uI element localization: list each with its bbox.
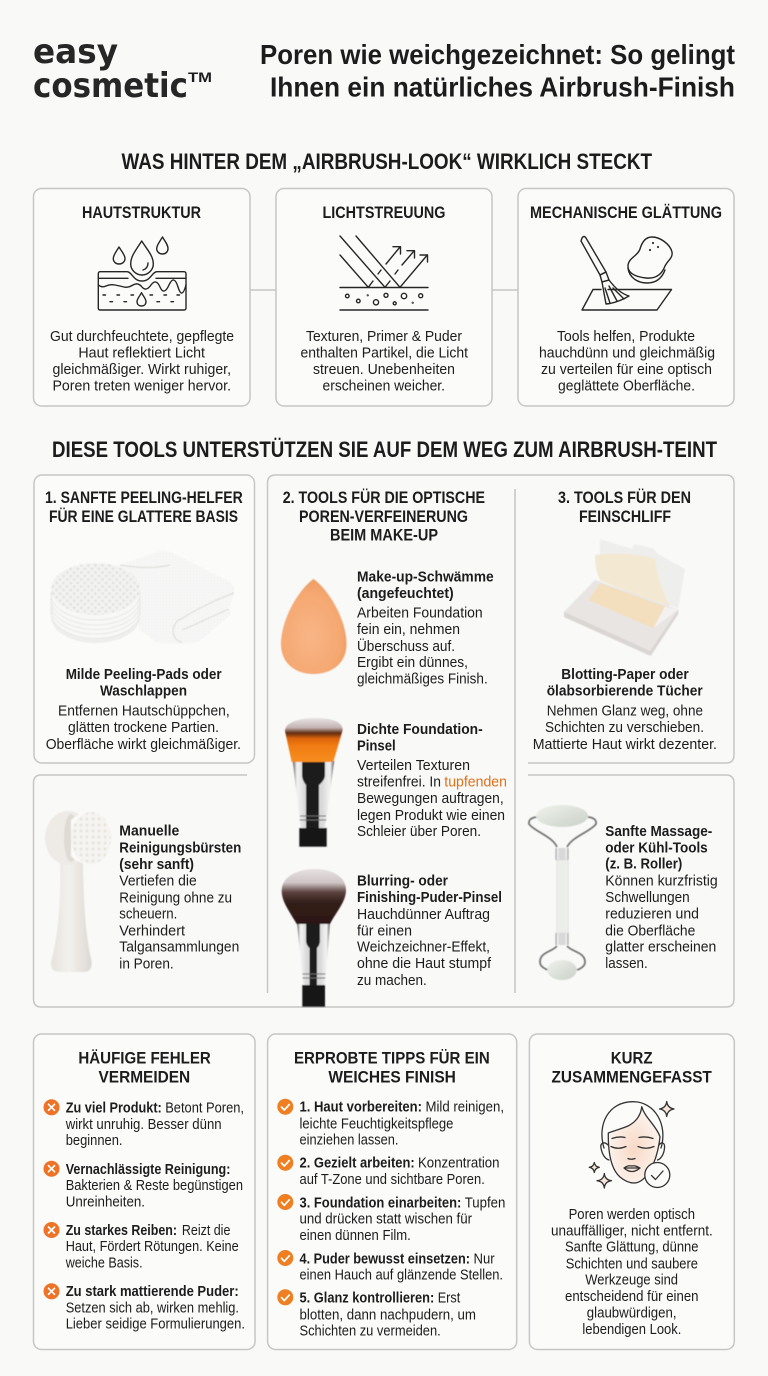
text: summary: Poren werden optisch xyxy=(569,1206,695,1223)
text: foundation brush xyxy=(357,721,507,840)
text: summary: Sanfte Glättung, dünne xyxy=(565,1239,698,1256)
icons: error markers xyxy=(44,1099,60,1299)
text: tips list: einen Hauch auf glänzende Stellen. xyxy=(300,1267,503,1284)
text: facial roller: oder Kühl-Tools xyxy=(605,839,708,856)
text: mistakes list: Zu viel Produkt: xyxy=(66,1099,162,1116)
icon: light scattering xyxy=(340,236,428,310)
text: blotting paper: Mattierte Haut wirkt dezenter. xyxy=(533,736,717,753)
text: foundation brush: legen Produkt wie einen xyxy=(357,807,505,824)
image: cleansing brush xyxy=(45,811,111,972)
panel: finishing tools xyxy=(533,488,717,753)
heading: airbrush look: WAS HINTER DEM „AIRBRUSH-LOOK“ WIRKLICH STECKT xyxy=(122,149,652,174)
heading: mistakes: HÄUFIGE FEHLER xyxy=(78,1048,211,1067)
heading: summary: ZUSAMMENGEFASST xyxy=(552,1068,712,1087)
text: mistakes list: beginnen. xyxy=(66,1132,122,1149)
text: make-up sponge: Make-up-Schwämme xyxy=(357,569,494,586)
text: peeling pads: Milde Peeling-Pads oder xyxy=(66,666,222,683)
logo: easy xyxy=(33,32,118,72)
text: Lichtstreuung: streuen. Unebenheiten xyxy=(313,361,455,378)
text: mistakes list: weiche Basis. xyxy=(65,1255,143,1272)
text: Mechanische Glättung: zu verteilen für eine optisch xyxy=(541,361,712,378)
text: mistakes list: Setzen sich ab, wirken mehlig. xyxy=(66,1299,239,1316)
heading: tips: ERPROBTE TIPPS FÜR EIN xyxy=(294,1048,490,1067)
text: powder brush: zu machen. xyxy=(357,972,427,989)
text: mistakes list: Vernachlässigte Reinigung: xyxy=(66,1161,230,1178)
text: make-up sponge: Arbeiten Foundation xyxy=(357,605,483,622)
text: foundation brush: Schleier über Poren. xyxy=(357,823,481,840)
text: tips list: auf T-Zone und sichtbare Poren. xyxy=(300,1171,485,1188)
text: tips list: 4. Puder bewusst einsetzen: xyxy=(300,1250,470,1267)
heading: section 2: POREN-VERFEINERUNG xyxy=(299,507,468,526)
text: mistakes list: wirkt unruhig. Besser dünn xyxy=(65,1116,222,1133)
text: Lichtstreuung: Texturen, Primer & Puder xyxy=(306,328,462,345)
heading: section 3: 3. TOOLS FÜR DEN xyxy=(558,488,691,507)
text: facial roller: Schwellungen xyxy=(605,889,690,906)
panel: optical pore refinement xyxy=(281,488,507,1007)
text: summary xyxy=(551,1206,713,1338)
text: powder brush: Blurring- oder xyxy=(357,873,448,890)
text: tips list: leichte Feuchtigkeitspflege xyxy=(300,1115,453,1132)
text: mistakes list: Zu stark mattierende Puder: xyxy=(66,1283,239,1300)
text: foundation brush: Bewegungen auftragen, xyxy=(357,790,504,807)
text: tips list: Tupfen xyxy=(465,1194,505,1211)
text: make-up sponge: Ergibt ein dünnes, xyxy=(357,654,468,671)
icon: face with sparkles and check xyxy=(589,1102,674,1188)
icons: check markers xyxy=(277,1099,293,1305)
panel: peeling helpers xyxy=(45,488,243,753)
text: facial roller xyxy=(605,823,718,972)
text: Lichtstreuung: enthalten Partikel, die Licht xyxy=(300,344,469,362)
text: cleansing brush: Vertiefen die xyxy=(119,873,197,890)
panel: Hautstruktur: HAUTSTRUKTUR xyxy=(82,203,201,222)
panel: summary xyxy=(529,1034,734,1350)
heading: mistakes: VERMEIDEN xyxy=(98,1068,190,1087)
title: Ihnen ein natürliches Airbrush-Finish xyxy=(270,72,735,102)
text: tips list: Nur xyxy=(474,1250,495,1267)
text: make-up sponge: fein ein, nehmen xyxy=(357,621,460,638)
text: cleansing brush: Manuelle xyxy=(119,823,179,840)
icon: brush and sponge xyxy=(581,236,672,310)
text: make-up sponge: gleichmäßiges Finish. xyxy=(357,670,488,688)
heading: section 2: BEIM MAKE-UP xyxy=(330,526,438,544)
text: facial roller: glatter erscheinen xyxy=(605,939,716,956)
image: powder brush xyxy=(282,869,346,1007)
text: summary: entscheidend für einen xyxy=(565,1288,698,1305)
text: Mechanische Glättung: hauchdünn und gleichmäßig xyxy=(539,344,715,362)
text: tips list: Konzentration xyxy=(418,1155,500,1172)
text: tips list: blotten, dann nachpudern, um xyxy=(300,1306,476,1323)
text: blotting paper: Schichten zu verschieben. xyxy=(545,719,704,736)
text: Hautstruktur xyxy=(50,328,234,394)
text: summary: Werkzeuge sind xyxy=(585,1272,678,1289)
text: foundation brush: streifenfrei. In xyxy=(357,774,441,791)
logo: cosmetic xyxy=(33,66,188,106)
text: mistakes list: Lieber seidige Formulierungen. xyxy=(66,1316,245,1333)
text: cleansing brush: in Poren. xyxy=(119,955,174,972)
heading: tips: WEICHES FINISH xyxy=(328,1068,456,1087)
text: cleansing brush: Talgansammlungen xyxy=(119,939,239,956)
text: summary: Schichten und saubere xyxy=(566,1255,698,1272)
title: Poren wie weichgezeichnet: So gelingt xyxy=(260,39,735,70)
panel: Lichtstreuung xyxy=(276,188,492,406)
text: cleansing brush: Reinigungsbürsten xyxy=(119,839,241,856)
text: Mechanische Glättung: Tools helfen, Produkte xyxy=(557,328,695,345)
text: powder brush: ohne die Haut stumpf xyxy=(357,955,492,972)
text: tips list: 1. Haut vorbereiten: xyxy=(300,1099,422,1116)
text: tips list: Schichten zu vermeiden. xyxy=(300,1323,441,1340)
text: facial roller: Können kurzfristig xyxy=(605,873,718,890)
heading: tips xyxy=(294,1048,490,1087)
title xyxy=(260,39,735,102)
text: Hautstruktur: Haut reflektiert Licht xyxy=(78,344,206,362)
text: tips list: einen dünnen Film. xyxy=(300,1227,411,1244)
text: make-up sponge: Überschuss auf. xyxy=(357,637,455,655)
text: facial roller: Sanfte Massage- xyxy=(605,823,712,840)
text: mistakes list: Haut, Fördert Rötungen. Keine xyxy=(66,1238,239,1255)
text: tips list: 3. Foundation einarbeiten: xyxy=(300,1194,461,1211)
text: mistakes list: Zu starkes Reiben: xyxy=(66,1222,177,1239)
text: Hautstruktur: Gut durchfeuchtete, gepflegte xyxy=(50,328,234,345)
text: peeling pads: Oberfläche wirkt gleichmäßiger. xyxy=(46,736,241,753)
text: blotting paper: ölabsorbierende Tücher xyxy=(547,683,703,700)
text: foundation brush: tupfenden xyxy=(444,774,507,791)
text: mistakes list: Unreinheiten. xyxy=(66,1194,145,1211)
panel: Lichtstreuung: LICHTSTREUUNG xyxy=(322,203,446,222)
panel: Mechanische Glättung xyxy=(518,188,734,406)
heading: mistakes xyxy=(78,1048,211,1087)
text: foundation brush: Verteilen Texturen xyxy=(357,757,470,774)
text: powder brush: für einen xyxy=(357,922,412,939)
text: peeling pads: Waschlappen xyxy=(100,683,187,700)
image: make-up sponge xyxy=(281,579,346,674)
text: blotting paper: Nehmen Glanz weg, ohne xyxy=(547,703,703,720)
text: mistakes list: Reizt die xyxy=(182,1222,230,1239)
heading: summary xyxy=(552,1048,712,1087)
logo: TM xyxy=(188,69,212,85)
text: cleansing brush: Reinigung ohne zu xyxy=(119,889,232,906)
text: powder brush: Hauchdünner Auftrag xyxy=(357,906,490,923)
text: Hautstruktur: Poren treten weniger hervor. xyxy=(52,378,231,394)
heading: section 3 xyxy=(558,488,691,526)
text: foundation brush: Pinsel xyxy=(357,738,396,755)
text: summary: glaubwürdigen, xyxy=(587,1305,676,1322)
heading: section 1: 1. SANFTE PEELING-HELFER xyxy=(45,488,243,507)
text: summary: unauffälliger, nicht entfernt. xyxy=(551,1222,713,1239)
text: cleansing brush xyxy=(119,823,241,972)
text: peeling pads xyxy=(46,666,241,753)
text: Lichtstreuung: erscheinen weicher. xyxy=(322,378,445,394)
icon: skin with water drops xyxy=(98,237,186,310)
heading: section 3: FEINSCHLIFF xyxy=(579,507,671,526)
text: facial roller: reduzieren und xyxy=(605,906,699,923)
image: facial roller xyxy=(529,805,596,980)
image: foundation brush xyxy=(285,718,343,847)
text: mistakes list: Bakterien & Reste begünstigen xyxy=(66,1177,243,1194)
logo xyxy=(33,32,212,106)
panel: mistakes xyxy=(34,1034,255,1350)
connectors between cards xyxy=(250,289,518,291)
text: powder brush: Weichzeichner-Effekt, xyxy=(357,939,490,956)
text: Lichtstreuung xyxy=(300,328,469,394)
text: cleansing brush: scheuern. xyxy=(119,905,177,922)
text: peeling pads: glätten trockene Partien. xyxy=(68,719,219,736)
text: Mechanische Glättung xyxy=(539,328,715,394)
heading: section 2 xyxy=(283,488,485,544)
text: tips list: 5. Glanz kontrollieren: xyxy=(300,1290,434,1307)
text: summary: lebendigen Look. xyxy=(582,1321,681,1338)
text: mistakes list: Betont Poren, xyxy=(165,1099,244,1116)
text: cleansing brush: (sehr sanft) xyxy=(119,856,194,873)
text: tips list: 2. Gezielt arbeiten: xyxy=(300,1155,415,1172)
text: tips list: Erst xyxy=(438,1290,461,1307)
heading: summary: KURZ xyxy=(611,1048,652,1067)
heading: section 1 xyxy=(45,488,243,526)
text: tips list: einziehen lassen. xyxy=(300,1131,398,1148)
text: make-up sponge xyxy=(357,569,494,688)
text: tips list xyxy=(300,1099,505,1340)
text: powder brush: Finishing-Puder-Pinsel xyxy=(357,889,502,906)
text: blotting paper xyxy=(533,666,717,753)
heading: section 2: 2. TOOLS FÜR DIE OPTISCHE xyxy=(283,488,485,507)
text: facial roller: die Oberfläche xyxy=(605,922,695,939)
text: make-up sponge: (angefeuchtet) xyxy=(357,585,454,602)
text: Mechanische Glättung: geglättete Oberfläche. xyxy=(558,378,695,394)
text: facial roller: lassen. xyxy=(605,955,648,972)
text: foundation brush: Dichte Foundation- xyxy=(357,721,483,738)
text: mistakes list xyxy=(65,1099,245,1333)
panel frame: tools sections xyxy=(34,475,734,1007)
panel: tips xyxy=(268,1034,517,1350)
text: peeling pads: Entfernen Hautschüppchen, xyxy=(58,703,230,720)
text: facial roller: (z. B. Roller) xyxy=(605,856,682,873)
panel: Hautstruktur xyxy=(34,188,250,406)
text: blotting paper: Blotting-Paper oder xyxy=(561,666,689,683)
heading: section 1: FÜR EINE GLATTERE BASIS xyxy=(49,507,238,526)
text: tips list: Mild reinigen, xyxy=(426,1099,504,1116)
text: tips list: und drücken statt wischen für xyxy=(300,1211,472,1228)
panel: Mechanische Glättung: MECHANISCHE GLÄTTUNG xyxy=(530,203,722,222)
image: blotting paper xyxy=(564,539,685,656)
text: Hautstruktur: gleichmäßiger. Wirkt ruhiger, xyxy=(52,361,231,378)
image: cotton pads and towel xyxy=(51,550,234,644)
text: cleansing brush: Verhindert xyxy=(119,923,186,940)
text: powder brush xyxy=(357,873,502,989)
